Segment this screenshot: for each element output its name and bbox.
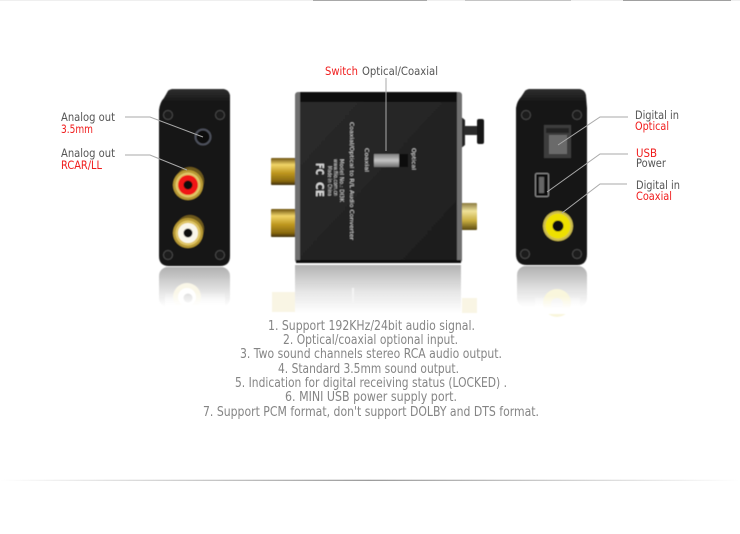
bottom divider [0, 479, 740, 481]
device silk labels: Optical [410, 148, 416, 171]
label: digital in optical: Optical [635, 119, 669, 133]
feature list: 2. Optical/coaxial optional input. [283, 333, 458, 348]
label: switch: Switch [325, 64, 358, 78]
feature list [203, 319, 539, 420]
icon: optical port [544, 125, 571, 158]
RCA barrel right [459, 203, 477, 230]
device silk labels: www.fiio.com.cn [332, 159, 338, 196]
icon: 3.5mm jack [196, 130, 210, 144]
reflection: left device [159, 267, 230, 312]
feature list: 4. Standard 3.5mm sound output. [278, 362, 459, 377]
label: analog out RCAR/LL: Analog out [61, 146, 115, 160]
label: digital in coaxial: Coaxial [636, 189, 672, 203]
left device: analog outputs [159, 89, 230, 266]
reflection: center device [272, 265, 477, 313]
label: analog out RCAR/LL: RCAR/LL [61, 158, 103, 172]
device silk labels: Model No.: DI3K [338, 159, 344, 202]
label: analog out 3.5mm: Analog out [61, 110, 115, 124]
reflection: right device [517, 266, 587, 317]
device silk labels: FC [313, 163, 326, 175]
label: analog out RCAR/LL [61, 146, 115, 172]
label: analog out 3.5mm [61, 110, 115, 136]
icon: yellow coaxial socket [543, 211, 573, 241]
optical plug [460, 116, 465, 149]
icon: white RCA socket [173, 215, 204, 248]
label: digital in coaxial [636, 178, 680, 203]
label: digital in coaxial: Digital in [636, 178, 680, 192]
label: USB power [636, 146, 666, 170]
feature list: 1. Support 192KHz/24bit audio signal. [268, 319, 475, 334]
label: switch: Optical/Coaxial [362, 64, 438, 78]
device silk labels [313, 122, 416, 241]
device silk labels: CE [313, 182, 326, 197]
feature list: 7. Support PCM format, don't support DOLBY and DTS format. [203, 405, 539, 420]
label: USB power: USB [636, 146, 657, 160]
device silk labels: Made in China [326, 166, 332, 196]
label: digital in optical [635, 108, 679, 133]
switch [374, 154, 408, 167]
right device: digital inputs [516, 89, 587, 265]
icon: red RCA socket [173, 167, 204, 200]
center device: top view [271, 92, 484, 263]
top edge strip [0, 0, 740, 1]
screws [164, 110, 224, 260]
label: digital in optical: Digital in [635, 108, 679, 122]
leader lines [125, 78, 628, 213]
feature list: 3. Two sound channels stereo RCA audio output. [240, 347, 502, 362]
RCA barrels left [271, 158, 296, 185]
label: switch [325, 64, 438, 78]
icon: mini USB port [536, 174, 548, 196]
label: USB power: Power [636, 156, 666, 170]
device silk labels: Coaxial [363, 148, 369, 173]
label: analog out 3.5mm: 3.5mm [61, 122, 93, 136]
feature list: 6. MINI USB power supply port. [285, 390, 457, 405]
device silk labels: Coaxial/Optical to R/L Audio Converter [348, 122, 354, 241]
case [295, 92, 462, 263]
feature list: 5. Indication for digital receiving status (LOCKED) . [235, 376, 507, 391]
